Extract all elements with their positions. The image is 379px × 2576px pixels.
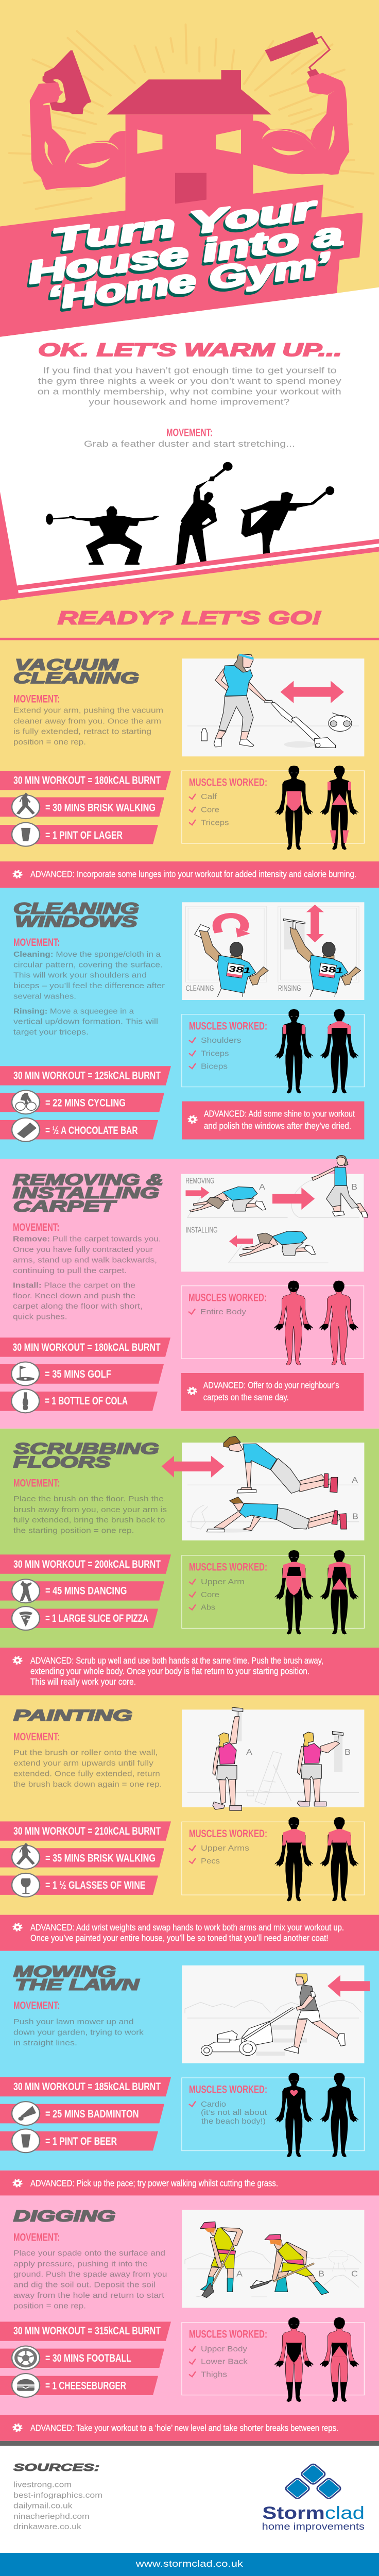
- panel: carpet illustration: B: [351, 1182, 357, 1192]
- warm up movement: [84, 427, 295, 448]
- stat bars: 30 MIN WORKOUT = 180kCAL BURNT: [13, 774, 161, 787]
- icon: wine glass: [12, 1873, 40, 1897]
- advanced box: carpets on the same day.: [203, 1393, 289, 1403]
- stat bars: 30 MIN WORKOUT = 210kCAL BURNT: [13, 1825, 161, 1837]
- movement text: Push your lawn mower up and: [13, 2018, 134, 2026]
- heading: mowing the lawn: MOWING: [13, 1962, 116, 1980]
- movement text: down your garden, trying to work: [13, 2029, 144, 2037]
- body front with heart: [274, 2073, 313, 2157]
- heading: cleaning windows: CLEANING: [13, 900, 139, 917]
- advanced band: This will really work your core.: [30, 1676, 136, 1687]
- icon: boombox: [329, 713, 352, 732]
- stat bars: = ½ A CHOCOLATE BAR: [45, 1125, 138, 1137]
- movement text: the brush back down again = one rep.: [13, 1781, 162, 1788]
- heading: cleaning windows: [13, 900, 139, 930]
- main title: Turn Your: [48, 193, 319, 261]
- man cleaning: 381: [228, 964, 252, 975]
- SECTION 5: painting: [0, 1696, 379, 1951]
- squeegee: [284, 919, 305, 929]
- ready heading: READY? LET'S GO!: [58, 608, 321, 629]
- man cleaning: [195, 925, 268, 997]
- movement text: is fully extended, retract to starting: [13, 728, 151, 736]
- movement text: Install: Place the carpet on the: [13, 1282, 135, 1290]
- panel: painting illustration: B: [344, 1748, 351, 1757]
- vacuum cleaner: [265, 700, 336, 748]
- body back: [320, 2073, 359, 2157]
- stat bars: = 1 LARGE SLICE OF PIZZA: [45, 1613, 148, 1625]
- panel: painting illustration: A: [246, 1748, 253, 1757]
- movement text: This will work your shoulders and: [13, 972, 147, 979]
- movement text: Remove: Pull the carpet towards you.: [13, 1235, 161, 1243]
- movement text: MOVEMENT:: [13, 1999, 60, 2012]
- muscles worked panel: [182, 1009, 364, 1093]
- movement text: Extend your arm, pushing the vacuum: [13, 707, 163, 715]
- SECTION 3: removing and installing carpet: [0, 1156, 379, 1429]
- panel: digging illustration: [182, 2210, 364, 2308]
- arrow: back and forth: [281, 681, 344, 703]
- stat bars: = 1 PINT OF BEER: [45, 2136, 117, 2147]
- stretching silhouettes with feather dusters: [46, 462, 334, 568]
- movement text: away from the hole and return to start: [13, 2292, 165, 2300]
- movement text: position = one rep.: [13, 2302, 86, 2310]
- figure: digger B: [250, 2234, 329, 2295]
- muscles worked panel: Pecs: [201, 1857, 220, 1866]
- icon: chocolate bar: [12, 1118, 40, 1142]
- muscles worked panel: [182, 766, 364, 850]
- body front: [274, 1009, 313, 1093]
- stat bars: = 22 MINS CYCLING: [45, 1097, 126, 1109]
- movement text: position = one rep.: [13, 738, 86, 747]
- advanced band: [0, 2171, 379, 2195]
- left flexing arm: [30, 82, 126, 190]
- heading: carpet: INSTALLING: [13, 1184, 159, 1201]
- stat bars: = 1 PINT OF LAGER: [45, 829, 123, 842]
- icon: golf: [11, 1362, 39, 1385]
- man mowing: [284, 1974, 345, 2053]
- icon: water bottle: [201, 728, 207, 741]
- logo wordmark: Stormclad: [262, 2503, 365, 2522]
- house roof: [107, 70, 271, 114]
- sources list: best-infographics.com: [13, 2492, 102, 2500]
- heading: scrubbing floors: FLOORS: [13, 1453, 111, 1471]
- figure: digger A: [200, 2222, 243, 2298]
- muscles worked panel: Biceps: [201, 1062, 228, 1071]
- movement text: MOVEMENT:: [13, 937, 60, 949]
- movement text: [13, 2231, 167, 2310]
- stat bars: 30 MIN WORKOUT = 180kCAL BURNT: [12, 1342, 161, 1354]
- movement text: biceps – you’ll feel the difference after: [13, 982, 165, 990]
- movement text: Place the brush on the floor. Push the: [13, 1495, 164, 1503]
- main title: Turn Your: [49, 190, 321, 258]
- muscles worked panel: [182, 1817, 364, 1902]
- advanced band: ADVANCED: Pick up the pace; try power walking whilst cutting the grass.: [30, 2178, 278, 2189]
- sources list: dailymail.co.uk: [13, 2502, 73, 2510]
- heading: mowing the lawn: THE LAWN: [15, 1976, 140, 1993]
- movement text: apply pressure, pushing it into the: [13, 2260, 148, 2268]
- stat bars: = 35 MINS GOLF: [45, 1368, 111, 1381]
- figure: removing B: [312, 1156, 368, 1217]
- pink stripes under warm up: [0, 492, 379, 601]
- stat bars: [0, 1554, 171, 1630]
- house windows: [137, 129, 241, 154]
- stat bars: [0, 771, 171, 846]
- stat bars: [0, 1066, 171, 1142]
- icon: paint roller held in right arm: [265, 32, 330, 78]
- panel: window cleaning illustration: [182, 902, 364, 1000]
- figure: painter A: [213, 1707, 243, 1810]
- icon: dancer: [12, 1579, 40, 1603]
- panel: carpet illustration: INSTALLING: [186, 1226, 218, 1234]
- stat bars: [0, 1337, 170, 1413]
- page background yellow header: [0, 0, 379, 341]
- body front: [274, 1281, 313, 1365]
- movement text: in straight lines.: [13, 2039, 77, 2047]
- SECTION 6: mowing the lawn: [0, 1951, 379, 2195]
- heading: scrubbing floors: SCRUBBING: [14, 1440, 159, 1458]
- advanced band: [0, 2415, 379, 2441]
- heading: scrubbing floors: [13, 1440, 159, 1471]
- body front: [274, 2317, 313, 2402]
- movement text: Place your spade onto the surface and: [13, 2249, 165, 2258]
- stat bars: = 1 CHEESEBURGER: [45, 2380, 126, 2392]
- movement text: MOVEMENT:: [13, 1731, 60, 1743]
- main title: ‘Home Gym’: [45, 246, 334, 316]
- icon: pint: [12, 2129, 40, 2153]
- website bar: [0, 2553, 379, 2576]
- stat bars: 30 MIN WORKOUT = 315kCAL BURNT: [13, 2325, 161, 2337]
- movement text: extend your arm upwards until fully: [13, 1759, 153, 1768]
- advanced box: [182, 1101, 364, 1140]
- man rinsing: 381: [320, 964, 344, 975]
- body back: [320, 1009, 359, 1093]
- figure: removing A: [190, 1187, 266, 1212]
- sources list: livestrong.com: [13, 2481, 72, 2489]
- figure: squat: [46, 506, 160, 565]
- icon: pint: [12, 823, 40, 846]
- warm up movement: MOVEMENT:: [166, 427, 213, 439]
- muscles worked panel: Upper Arm: [201, 1578, 245, 1586]
- heading: painting: PAINTING: [13, 1706, 132, 1724]
- SECTION 1: vacuum cleaning: [0, 654, 379, 888]
- lawn mower: [201, 2007, 295, 2056]
- muscles worked panel: MUSCLES WORKED:: [189, 1561, 267, 1573]
- figure: leg stretch: [240, 486, 334, 568]
- muscles worked panel: (it’s not all about: [201, 2108, 267, 2117]
- panel: painting illustration: [182, 1707, 364, 1810]
- heading: carpet: [13, 1171, 163, 1215]
- movement text: continuing to pull the carpet.: [13, 1267, 127, 1275]
- header illustration: muscular house: [0, 25, 373, 337]
- heading: vacuum cleaning: CLEANING: [13, 669, 139, 687]
- movement text: Put the brush or roller onto the wall,: [13, 1749, 158, 1757]
- sources list: drinkaware.co.uk: [13, 2523, 81, 2531]
- body back: [319, 1281, 358, 1365]
- movement text: arms, stand up and walk backwards,: [13, 1257, 157, 1264]
- icon: football: [12, 2346, 40, 2369]
- panel: vacuum illustration: [182, 654, 364, 756]
- figure: installing: [239, 1231, 316, 1257]
- movement text: [13, 1477, 167, 1535]
- body back: [320, 1550, 359, 1635]
- heading: vacuum cleaning: VACUUM: [15, 656, 118, 673]
- stat bars: = 30 MINS BRISK WALKING: [45, 802, 156, 814]
- warm up intro text: If you find that you haven’t got enough time to get yourself to: [43, 365, 337, 375]
- muscles worked panel: Lower Back: [201, 2358, 248, 2366]
- warm up intro text: the gym three nights a week or you don’t want to spend money: [38, 376, 342, 386]
- woman vacuuming: [214, 654, 272, 747]
- arrow: circular: [217, 916, 250, 938]
- muscles worked panel: Upper Body: [201, 2345, 248, 2353]
- icon: pizza: [12, 1606, 40, 1630]
- muscles worked panel: Core: [201, 806, 219, 814]
- logo mark: [284, 2463, 342, 2500]
- arrow: direction of mowing: [328, 1975, 370, 1997]
- panel: scrubbing illustration: A: [352, 1476, 358, 1485]
- body back: [320, 2317, 359, 2402]
- panel: digging illustration: C: [351, 2269, 358, 2278]
- figure: scrubbing A with arrow: [162, 1436, 359, 1494]
- icon: walking: [12, 792, 40, 819]
- muscles worked panel: MUSCLES WORKED:: [189, 1020, 267, 1032]
- movement text: [13, 693, 163, 747]
- sources list: SOURCES:: [13, 2462, 99, 2473]
- movement text: [13, 937, 165, 1037]
- yellow section 1 background: [0, 552, 379, 862]
- muscles worked panel: MUSCLES WORKED:: [189, 1828, 267, 1840]
- muscles worked panel: Cardio: [201, 2100, 226, 2108]
- panel: scrubbing illustration: [162, 1436, 364, 1540]
- movement text: and dig the soil out. Deposit the soil: [13, 2281, 156, 2289]
- panel: window cleaning illustration: RINSING: [278, 984, 301, 993]
- movement text: brush away from you, once your arm is: [13, 1506, 167, 1514]
- figure: side stretch: [174, 462, 233, 568]
- arrow: up and down: [306, 905, 324, 942]
- muscles worked panel: [181, 1281, 364, 1365]
- body front: [274, 766, 313, 850]
- main title: House into a: [25, 216, 346, 291]
- icon: cola bottle: [11, 1389, 39, 1413]
- advanced band: [0, 861, 379, 888]
- warm up heading: OK. LET'S WARM UP...: [38, 340, 342, 360]
- SECTION 7: digging: [0, 2195, 379, 2441]
- main title: House into a: [24, 219, 344, 293]
- movement text: cleaner away from you. Once the arm: [13, 717, 161, 725]
- icon: cheeseburger: [12, 2374, 40, 2397]
- icon: shuttlecock: [12, 2102, 40, 2125]
- body front: [274, 1550, 313, 1635]
- house body: [126, 114, 253, 219]
- muscles worked panel: MUSCLES WORKED:: [189, 2328, 267, 2341]
- heading: vacuum cleaning: [13, 656, 139, 687]
- muscles worked panel: MUSCLES WORKED:: [189, 776, 267, 789]
- panel: scrubbing illustration: B: [352, 1512, 358, 1521]
- panel: carpet illustration: REMOVING: [186, 1176, 214, 1185]
- stat bars: = 25 MINS BADMINTON: [45, 2108, 139, 2121]
- muscles worked panel: [182, 1550, 364, 1635]
- main title: ‘Home Gym’: [43, 249, 333, 319]
- movement text: MOVEMENT:: [13, 693, 60, 705]
- stat bars: 30 MIN WORKOUT = 185kCAL BURNT: [13, 2081, 161, 2093]
- muscles worked panel: Thighs: [201, 2370, 227, 2379]
- movement text: Rinsing: Move a squeegee in a: [13, 1007, 134, 1015]
- SECTION 4: scrubbing floors: [0, 1429, 379, 1696]
- muscles worked panel: Shoulders: [201, 1036, 242, 1045]
- movement text: fully extended, bring the brush back to: [13, 1516, 165, 1524]
- man rinsing: [290, 927, 360, 997]
- body back: [320, 766, 359, 850]
- movement text: carpet along the floor with short,: [13, 1302, 143, 1311]
- movement text: Cleaning: Move the sponge/cloth in a: [13, 951, 161, 959]
- muscles worked panel: Calf: [201, 792, 217, 801]
- title banner: [0, 184, 363, 337]
- panel: window cleaning illustration: CLEANING: [186, 984, 214, 993]
- icon: walking: [12, 1843, 40, 1869]
- right flexing arm: [253, 73, 349, 175]
- movement text: MOVEMENT:: [13, 1477, 60, 1489]
- icon: cycling: [12, 1090, 40, 1114]
- heading: carpet: CARPET: [13, 1197, 117, 1215]
- muscles worked panel: the beach body!): [201, 2117, 266, 2126]
- stepladder and mug: [247, 1752, 291, 1805]
- muscles worked panel: Entire Body: [200, 1308, 247, 1316]
- website bar: www.stormclad.co.uk: [135, 2558, 243, 2569]
- panel: digging illustration: A: [236, 2269, 243, 2278]
- advanced band: [0, 1915, 379, 1951]
- heading: carpet: REMOVING &: [13, 1171, 163, 1188]
- stat bars: = 35 MINS BRISK WALKING: [45, 1852, 156, 1865]
- movement text: ground. Push the spade away from you: [13, 2270, 167, 2279]
- advanced band: [0, 1648, 379, 1696]
- muscles worked panel: [182, 2317, 364, 2402]
- movement text: [13, 1999, 144, 2047]
- panel: mowing illustration: [182, 1965, 370, 2063]
- figure: painter B: [297, 1732, 343, 1806]
- icon: iron held in left arm: [43, 50, 91, 114]
- movement text: vertical up/down formation. This will: [13, 1018, 158, 1026]
- sun rays: [9, 25, 373, 209]
- stat bars: = 1 ½ GLASSES OF WINE: [45, 1879, 146, 1892]
- movement text: quick pushes.: [13, 1313, 67, 1321]
- muscles worked panel: MUSCLES WORKED:: [189, 2083, 267, 2096]
- movement text: [13, 1222, 161, 1321]
- panel: digging illustration: B: [318, 2269, 324, 2278]
- muscles worked panel: Upper Arms: [201, 1844, 249, 1853]
- stat bars: = 45 MINS DANCING: [45, 1585, 127, 1597]
- heading: digging: DIGGING: [13, 2207, 115, 2225]
- heading: mowing the lawn: [13, 1962, 140, 1993]
- main title: [24, 190, 346, 319]
- stat bars: [0, 1821, 171, 1897]
- movement text: [13, 1731, 162, 1788]
- stat bars: [0, 2077, 171, 2153]
- stat bars: = 30 MINS FOOTBALL: [45, 2352, 131, 2364]
- movement text: the starting position = one rep.: [13, 1527, 134, 1535]
- stat bars: 30 MIN WORKOUT = 125kCAL BURNT: [13, 1070, 161, 1082]
- panel: carpet illustration: [181, 1156, 368, 1272]
- movement text: several washes.: [13, 993, 76, 1001]
- movement text: circular pattern, covering the surface.: [13, 961, 163, 969]
- arrows: [185, 1187, 315, 1247]
- stormclad logo: [262, 2463, 365, 2532]
- movement text: floor. Kneel down and push the: [13, 1292, 135, 1300]
- body front: [274, 1817, 313, 1902]
- advanced box: [181, 1373, 364, 1411]
- footer: [0, 2441, 379, 2576]
- body back: [320, 1817, 359, 1902]
- muscles worked panel: MUSCLES WORKED:: [188, 1292, 267, 1304]
- warm up intro text: your housework and home improvement?: [89, 397, 289, 406]
- stat bars: = 1 BOTTLE OF COLA: [45, 1395, 128, 1407]
- muscles worked panel: [182, 2073, 364, 2157]
- warm up movement: Grab a feather duster and start stretching...: [84, 438, 295, 448]
- movement text: extended. Once fully extended, return: [13, 1770, 160, 1778]
- warm up intro text: [38, 365, 342, 406]
- figure: scrubbing B with cat: [187, 1497, 359, 1533]
- muscles worked panel: Triceps: [201, 818, 229, 827]
- sources list: [13, 2462, 102, 2531]
- stat bars: 30 MIN WORKOUT = 200kCAL BURNT: [13, 1558, 161, 1570]
- stat bars: [0, 2321, 171, 2397]
- heading: cleaning windows: WINDOWS: [15, 913, 137, 930]
- movement text: MOVEMENT:: [13, 2231, 60, 2244]
- logo tagline: home improvements: [262, 2522, 365, 2532]
- SECTION 2: cleaning windows: [0, 888, 379, 1159]
- panel: carpet illustration: A: [259, 1182, 266, 1192]
- kettle barbecue: [329, 2250, 348, 2272]
- sources list: ninacheriephd.com: [13, 2513, 90, 2520]
- movement text: target your triceps.: [13, 1028, 89, 1037]
- muscles worked panel: Abs: [201, 1603, 215, 1612]
- warm up intro text: on a monthly membership, why not combine your workout with: [38, 386, 341, 396]
- muscles worked panel: Core: [201, 1590, 219, 1599]
- muscles worked panel: Triceps: [201, 1049, 229, 1058]
- white warm-up section background: [0, 287, 379, 604]
- movement text: Once you have fully contracted your: [13, 1246, 153, 1254]
- house door: [175, 173, 206, 204]
- movement text: MOVEMENT:: [13, 1222, 59, 1234]
